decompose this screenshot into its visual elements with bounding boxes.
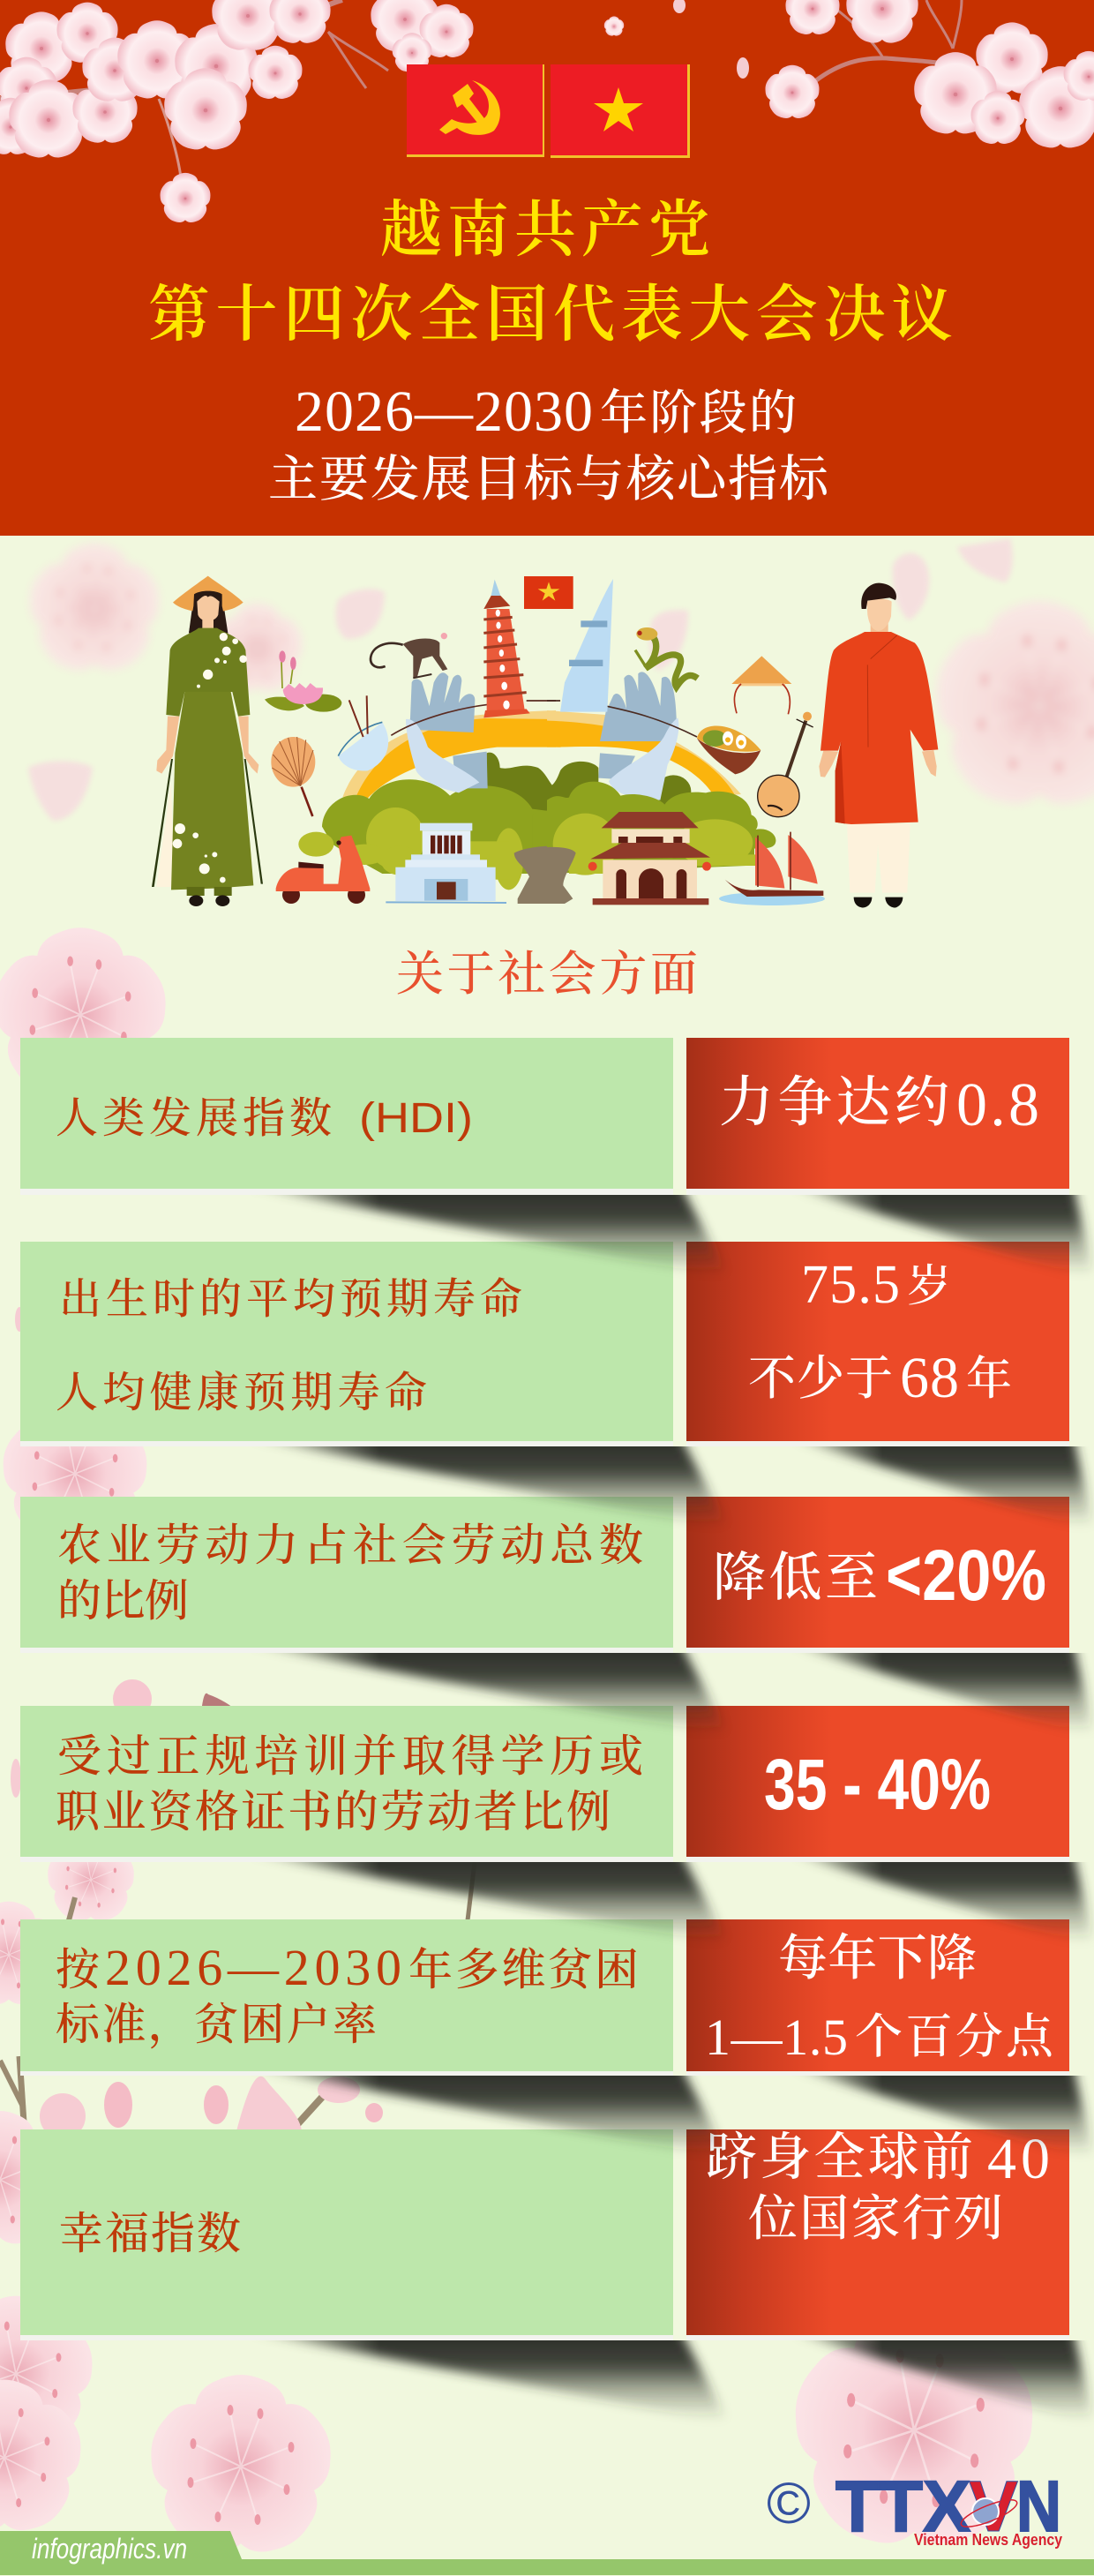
subtitle	[268, 379, 831, 507]
icon: palm fan	[271, 737, 315, 816]
row 2: life expectancy: 年	[966, 1354, 1012, 1405]
row 3: agricultural labour share: 的比例	[57, 1576, 189, 1626]
row 5: multidimensional poverty: 按	[56, 1945, 101, 1994]
row 2: life expectancy: 岁	[907, 1261, 951, 1311]
icon: lotus	[265, 650, 341, 712]
row 1: human development index: 0.8	[956, 1071, 1039, 1139]
icon: arch and bushes, right part	[547, 672, 776, 875]
icon: stone hand with monkey	[371, 633, 556, 792]
row 4: trained workers share: 职业资格证书的劳动者比例	[56, 1787, 611, 1836]
row 5: multidimensional poverty: 每年下降	[778, 1932, 977, 1986]
title: 越南共产党	[380, 197, 710, 265]
icon: scooter	[276, 836, 370, 904]
logo: TTXVN: ©	[767, 2470, 811, 2535]
row 3: agricultural labour share	[20, 1497, 1069, 1653]
footer band	[0, 2531, 1094, 2575]
illustration: Vietnam culture, right half	[524, 576, 938, 907]
icon: food basket	[697, 725, 761, 774]
icon: bronze drum, right part	[547, 847, 576, 904]
icon: temple	[588, 812, 711, 905]
icon: skyscraper	[560, 579, 613, 712]
row 2: life expectancy: 人均健康预期寿命	[56, 1370, 427, 1416]
title: 第十四次全国代表大会决议	[148, 282, 953, 349]
row 1: human development index: (HDI)	[359, 1095, 473, 1142]
flag: Vietnam	[551, 64, 690, 158]
title	[148, 197, 953, 349]
icon: mausoleum	[386, 823, 506, 903]
icon: bowl and chopsticks	[338, 695, 388, 771]
illustration: Vietnam culture, left half	[152, 576, 556, 906]
row 1: human development index: 人类发展指数	[56, 1095, 332, 1142]
subtitle: 2026—2030	[295, 379, 593, 444]
icon: dan nguyet lute	[758, 712, 813, 817]
icon: woman in ao dai	[152, 576, 263, 906]
icon: conical hat	[731, 656, 791, 714]
row 4: trained workers share: 35 - 40%	[764, 1745, 991, 1825]
logo: TTXVN: Vietnam News Agency	[914, 2531, 1062, 2549]
row 3: agricultural labour share: <20%	[886, 1536, 1046, 1616]
row 5: multidimensional poverty: 个百分点	[855, 2010, 1055, 2063]
icon: pagoda tower	[483, 580, 530, 717]
row 2: life expectancy	[20, 1242, 1069, 1446]
row 5: multidimensional poverty: 2026—2030	[105, 1939, 401, 1996]
logo: TTXVN: V	[969, 2467, 1018, 2547]
row 2: life expectancy: 68	[900, 1346, 959, 1410]
subtitle: 年阶段的	[600, 387, 797, 439]
row 5: multidimensional poverty: 标准，贫困户率	[56, 2000, 377, 2049]
icon: national flag	[524, 576, 573, 609]
row 2: life expectancy: 不少于	[748, 1352, 893, 1405]
footer band: infographics.vn	[32, 2533, 187, 2565]
row 5: multidimensional poverty: 年多维贫困	[408, 1945, 639, 1994]
blurred blossoms behind illustration	[21, 538, 1094, 822]
row 6: happiness index: 40	[987, 2127, 1050, 2191]
icon: arch bridge and bushes	[298, 710, 556, 890]
row 5: multidimensional poverty: 1—1.5	[705, 2009, 848, 2066]
drop shadows under rows	[229, 1183, 1094, 2425]
row 6: happiness index: 幸福指数	[59, 2209, 241, 2258]
logo: TTXVN: N	[1016, 2467, 1061, 2547]
section heading: 关于社会方面	[396, 948, 698, 1001]
logo: TTXVN: TTX	[835, 2467, 970, 2547]
row 3: agricultural labour share: 降低至	[713, 1549, 878, 1607]
row 4: trained workers share	[20, 1706, 1069, 1862]
row 5: multidimensional poverty	[20, 1919, 1069, 2076]
icon: bronze drum, left part	[514, 845, 556, 904]
row 6: happiness index: 位国家行列	[748, 2192, 1003, 2247]
row 2: life expectancy: 出生时的平均预期寿命	[59, 1276, 522, 1323]
body blossoms around rows	[0, 928, 1048, 2568]
flag: party	[407, 64, 544, 157]
row 6: happiness index: 跻身全球前	[706, 2129, 973, 2186]
row 6: happiness index	[20, 2127, 1069, 2340]
row 2: life expectancy: 75.5	[801, 1255, 900, 1315]
icon: sailing junk	[719, 832, 825, 905]
header band	[0, 0, 1094, 536]
branches	[0, 0, 1037, 187]
row 1: human development index: 力争达约	[719, 1073, 949, 1133]
icon: dragon	[635, 627, 698, 687]
logo: TTXVN	[767, 2467, 1062, 2549]
row 4: trained workers share: 受过正规培训并取得学历或	[57, 1731, 643, 1781]
icon: man in red ao dai	[819, 583, 938, 907]
row 1: human development index	[20, 1038, 1069, 1195]
subtitle: 主要发展目标与核心指标	[268, 453, 831, 507]
row 3: agricultural labour share: 农业劳动力占社会劳动总数	[57, 1521, 643, 1570]
